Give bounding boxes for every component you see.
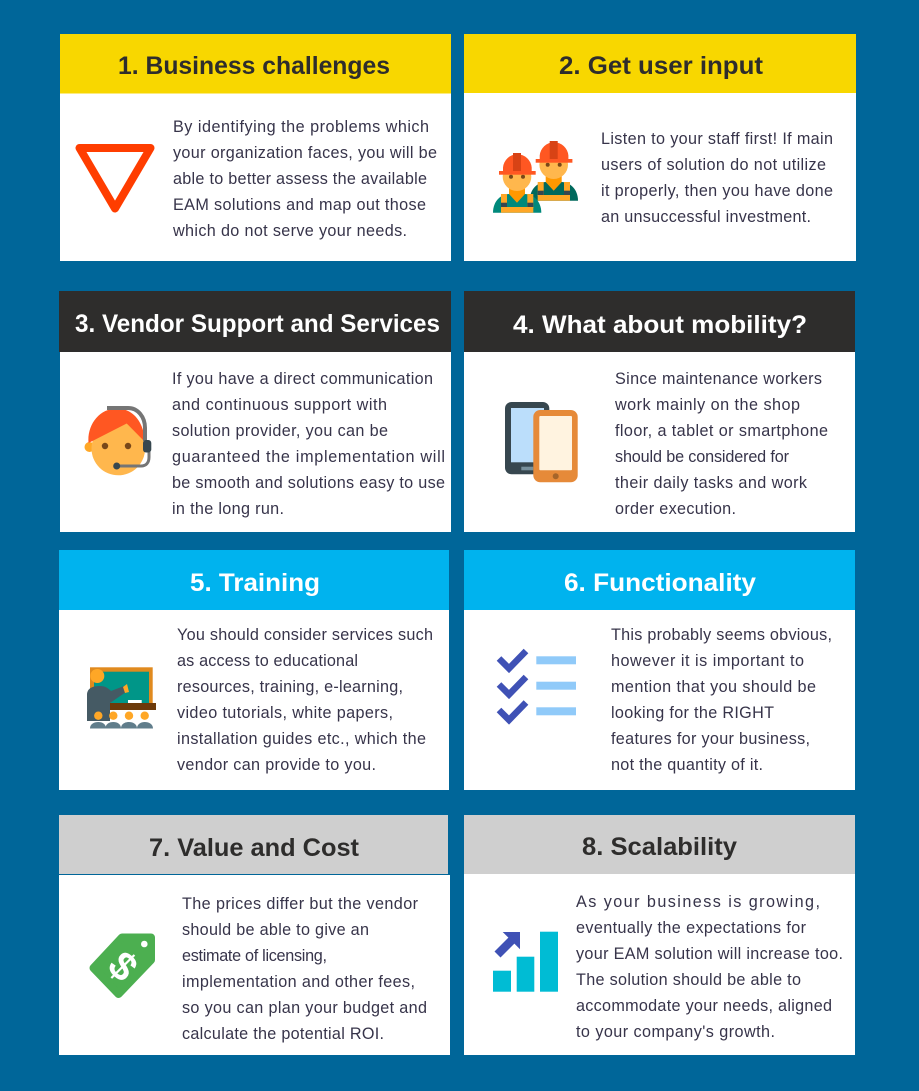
text block: video tutorials, white papers, (177, 704, 393, 722)
text block: mention that you should be (611, 678, 816, 696)
text block (611, 626, 832, 774)
panel: 3. Vendor Support and Services (59, 291, 451, 532)
text block: solution provider, you can be (172, 422, 388, 440)
text block (601, 130, 833, 226)
text block: The solution should be able to (576, 971, 801, 989)
panel body (464, 352, 855, 532)
text block: should be considered for (615, 448, 790, 466)
text block: features for your business, (611, 730, 810, 748)
panel body (464, 610, 855, 790)
icon: two workers with helmets (493, 141, 578, 213)
panel: 8. Scalability (464, 815, 855, 1055)
text block: Listen to your staff first! If main (601, 130, 833, 148)
text block: in the long run. (172, 500, 284, 518)
header bar (464, 291, 855, 352)
heading: 2. Get user input (559, 52, 764, 80)
text block: which do not serve your needs. (172, 222, 407, 240)
text block: however it is important to (611, 652, 804, 670)
text block: your organization faces, you will be (173, 144, 437, 162)
heading: 7. Value and Cost (149, 834, 360, 862)
icon: growth bar chart with arrow (493, 932, 558, 992)
text block: estimate of licensing, (182, 947, 327, 965)
text block: and continuous support with (172, 396, 387, 414)
text block: Since maintenance workers (615, 370, 822, 388)
header bar (59, 291, 451, 352)
text block: This probably seems obvious, (611, 626, 832, 644)
heading: 5. Training (190, 569, 320, 597)
text block: able to better assess the available (173, 170, 427, 188)
panel: 4. What about mobility? (464, 291, 855, 532)
panel body (464, 874, 855, 1055)
icon: green price tag (94, 938, 151, 994)
text block: resources, training, e-learning, (177, 678, 403, 696)
text block: floor, a tablet or smartphone (615, 422, 828, 440)
heading: 8. Scalability (582, 833, 737, 861)
heading: 4. What about mobility? (513, 311, 807, 339)
text block: By identifying the problems which (173, 118, 429, 136)
text block: it properly, then you have done (601, 182, 833, 200)
heading: 1. Business challenges (118, 52, 390, 80)
text block: order execution. (615, 500, 736, 518)
header bar (59, 550, 449, 610)
text block: EAM solutions and map out those (173, 196, 426, 214)
text block: your EAM solution will increase too. (576, 945, 843, 963)
text block: should be able to give an (182, 921, 369, 939)
header bar (60, 34, 451, 94)
text block (177, 626, 433, 774)
text block: implementation and other fees, (182, 973, 415, 991)
panel: 2. Get user input (464, 34, 856, 261)
text block (172, 370, 445, 518)
icon: tablet and smartphone (505, 402, 578, 482)
text block: be smooth and solutions easy to use (172, 474, 445, 492)
text block: calculate the potential ROI. (182, 1025, 384, 1043)
text block: an unsuccessful investment. (601, 208, 811, 226)
text block: If you have a direct communication (172, 370, 433, 388)
text block: vendor can provide to you. (177, 756, 376, 774)
text block: users of solution do not utilize (601, 156, 826, 174)
text block (172, 118, 437, 240)
panel: 1. Business challenges (60, 34, 451, 261)
panel: 5. Training (59, 550, 449, 790)
text block (576, 893, 843, 1041)
icon: yield triangle (80, 148, 150, 208)
text block (182, 895, 427, 1043)
heading: 6. Functionality (564, 569, 756, 597)
text block: accommodate your needs, aligned (576, 997, 832, 1015)
icon: green price tag: $ (99, 943, 146, 990)
text block: installation guides etc., which the (177, 730, 426, 748)
text block: eventually the expectations for (576, 919, 807, 937)
panel: 6. Functionality (464, 550, 855, 790)
text block: The prices differ but the vendor (182, 895, 419, 913)
panel body (59, 610, 449, 790)
text block (614, 370, 828, 518)
text block: so you can plan your budget and (182, 999, 427, 1017)
text block: to your company's growth. (576, 1023, 775, 1041)
text block: their daily tasks and work (615, 474, 808, 492)
panel body (59, 875, 450, 1055)
text block: work mainly on the shop (614, 396, 800, 414)
icon: checklist (499, 651, 576, 720)
text block: As your business is growing, (576, 893, 820, 911)
panel body (60, 352, 451, 532)
header bar (464, 550, 855, 610)
text block: You should consider services such (177, 626, 433, 644)
text block: guaranteed the implementation will (172, 448, 445, 466)
header bar (464, 815, 855, 874)
icon: support agent with headset (84, 408, 151, 475)
header bar (59, 815, 448, 874)
text block: looking for the RIGHT (611, 704, 774, 722)
icon: teacher at blackboard (87, 667, 156, 728)
panel body (464, 93, 856, 261)
text block: not the quantity of it. (611, 756, 763, 774)
heading: 3. Vendor Support and Services (75, 310, 440, 338)
panel: 7. Value and Cost (59, 815, 450, 1055)
header bar (464, 34, 856, 93)
panel body (60, 93, 451, 261)
text block: as access to educational (177, 652, 358, 670)
